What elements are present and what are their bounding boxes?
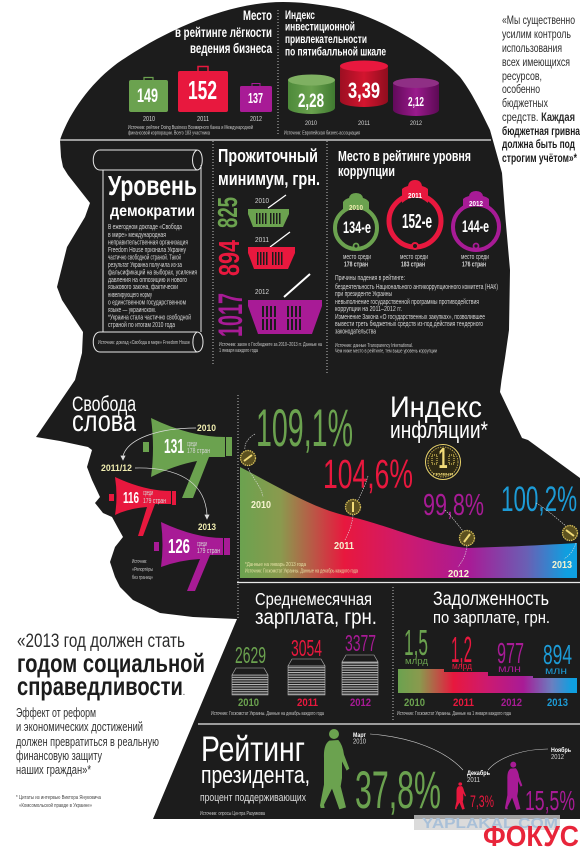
source [219,342,322,354]
years: 2011 [453,697,474,709]
values: 1,2 [451,629,472,670]
source: Источник: [132,559,147,565]
source: Источник: данные Transparency International. [335,343,413,349]
values: млрд [405,656,429,666]
stepped bar chart [398,669,577,693]
date labels: Ноябрь [551,746,571,754]
icon: red suitcase 2011 [178,66,228,112]
quote body: финансовую защиту [16,749,103,763]
area chart [240,467,577,578]
causes text: Причины падения в рейтинге: [335,274,405,282]
source [132,559,153,581]
timeline curves [370,734,548,770]
chart: green cylinder 2010: 2,28 [298,91,324,112]
date labels: 2010 [353,738,366,746]
values: 7,3% [470,792,494,811]
values: 3377 [345,630,376,656]
years: 2012 [250,116,262,123]
panel: freedom of speech: слова [72,405,136,438]
icon: basket 2011: 2011 [255,237,269,244]
footnote [16,795,101,809]
chart: purple cylinder 2012: 2,12 [408,94,424,109]
icon: basket 2012: 2012 [255,289,269,296]
years: 2012 [350,697,371,709]
panel: president rating [200,729,575,820]
icon: red megaphone: 116 [123,490,139,507]
icon: red walking man [455,782,466,810]
source: Источник: Госкомстат Украины. Данные на 1 января каждого года [397,711,511,717]
heading: Место в рейтинге уровня [338,148,471,165]
date labels [353,732,571,784]
icon: green walking man [320,729,349,809]
heading: в рейтинге лёгкости [175,25,272,40]
years: 2010 [404,697,425,709]
footnote: *Данные на январь 2013 года [245,562,306,568]
icon: red handcuff [389,180,441,249]
watermark: YAPLAKAL.COM [422,815,558,832]
source: без границ» [132,575,153,581]
footnote: * Цитаты из интервью Виктора Януковича [16,795,101,801]
icon: purple handcuff: 2012 [469,201,483,208]
body text: давления на оппозицию и нового [108,277,187,284]
icon: basket 2010: 2010 [255,198,269,205]
icon: green suitcase 2010 [129,78,168,112]
values: 977 [497,638,524,670]
chart: purple cylinder 2012 [393,78,439,116]
icon: green handcuff [335,193,377,249]
source: Источник: рейтинг Doing Business Всемирного банка и Международной [128,124,253,131]
chart: red cylinder 2011: 3,39 [348,78,380,103]
icon: red handcuff: 152-е [402,211,432,233]
date labels: Март [353,732,366,739]
year labels [101,423,216,532]
year labels: 2013 [552,560,572,571]
panel: level of democracy scroll [93,150,203,352]
quote: budget control: ресурсов, [502,71,542,83]
icon: hryvnia coin [426,443,460,480]
rotated values: 825 [212,197,243,228]
quote: budget control [502,15,580,165]
panel: average salary [211,589,378,717]
heading: Индекс [285,8,315,22]
causes text: законодательства [335,328,376,336]
captions [343,254,489,268]
body text: Freedom House признала Украину [108,247,186,254]
causes text: при президенте Украины [335,291,392,298]
icon: purple handcuff: 144-е [462,217,489,236]
body text: в мире» международная [108,232,166,239]
captions: место среди [461,254,489,261]
years [143,116,262,123]
source: Источник: закон о Госбюджете за 2010–2013 гг. Данные на [219,342,322,348]
panel: wage arrears: по зарплате, грн. [433,609,550,627]
date labels: Декабрь [467,769,490,777]
heading [175,8,272,56]
values: 3054 [291,635,322,661]
section divider lines [60,10,580,724]
icon: green suitcase 2010: 149 [137,86,158,107]
captions: 183 стран [401,262,425,268]
icon: purple megaphone: 126 [168,536,190,558]
body text: неправительственная организация [108,240,188,246]
body text: нивелирующего норму [108,292,152,299]
quote body: должен превратиться в реальную [16,735,159,749]
quote: social justice: «2013 год должен стать [17,631,185,652]
years: 2011 [297,697,318,709]
icon: hryvnia coin: 1 [438,443,448,475]
years: 2011 [358,121,371,127]
footnote: Источник: Госкомстат Украины. Данные на декабрь каждого года [245,568,358,574]
body text [108,223,197,329]
chart: green cylinder 2010 [288,74,335,114]
panel: president rating: процент поддерживающих [200,792,306,804]
years: 2012 [410,121,423,127]
body text: фальсификаций на выборах, усиления [108,268,197,276]
panel: ease of doing business [128,8,272,136]
years: 2011 [197,116,209,123]
quote: social justice: справедливости. [17,671,185,701]
panel: president rating: президента, [201,762,310,789]
body text: страной по итогам 2010 года [108,321,175,329]
body text: частично свободной страной. Такой [108,254,181,262]
heading: Уровень [108,170,197,201]
panel: president rating: Источник: опросы Центра Разумкова [200,811,265,817]
years [404,697,568,709]
heading: Прожиточный [218,145,318,166]
chart: red cylinder 2011 [340,60,388,107]
causes text: невыполнение государственной программы противодействия [335,298,479,306]
icon: green megaphone [143,418,232,498]
years: 2013 [547,697,568,709]
date labels: 2012 [551,754,564,761]
values: 104,6% [323,451,413,497]
values: 2629 [235,642,266,668]
year labels [251,500,572,580]
heading [338,148,471,180]
values: млрд [452,661,473,671]
body text: *Украина стала частично свободной [108,314,191,322]
source: Источник: Госкомстат Украины. Данные на декабрь каждого года [211,711,324,717]
causes text: коррупции на 2011–2012 гг. [335,306,402,313]
heading: Среднемесячная [255,589,372,609]
rotated values [212,197,250,337]
icon: basket 2011 [248,232,295,269]
quote: budget control: использования [502,43,562,55]
icon: small coins [240,450,578,546]
quote body [16,706,159,777]
rotated values: 1017 [212,293,250,337]
years [238,697,371,709]
values: 37,8% [355,761,441,820]
years: 2010 [238,697,259,709]
footnote [245,562,358,574]
quote body: и экономических достижений [16,720,143,734]
icon: green handcuff: 2010 [349,205,363,212]
year labels: 2012 [448,569,469,580]
panel: freedom of speech [72,393,232,591]
icon: green handcuff: 134-е [343,218,371,237]
icon: purple megaphone: среди [197,541,207,548]
source: 1 января каждого года [219,348,258,354]
icon: basket 2012 [248,274,322,334]
captions: 176 стран [462,262,486,268]
panel: investment attractiveness [284,8,439,136]
heading: привлекательности [285,32,367,46]
causes text: вывести треть бюджетных средств из-под действия тендерного [335,320,483,328]
body text: результат Украина получила из-за [108,262,182,269]
values: млн [498,664,521,675]
arrow: 2010 to 2011/12 [121,428,196,460]
causes text: бездеятельность Национального антикоррупционного комитета (НАК) [335,283,498,291]
quote body: Эффект от реформ [16,706,96,720]
source: финансовой корпорации. Всего 183 участника [128,130,210,136]
values [355,761,575,820]
source: «Репортёры [132,567,153,573]
values [235,630,376,668]
connector lines [245,434,576,567]
causes text [335,274,498,336]
values: 99,8% [423,487,484,522]
causes text: Изменение Закона «О государственных закупках», позволившее [335,314,485,321]
values [256,399,577,522]
heading: по пятибалльной шкале [285,44,386,58]
heading: Индекс [390,391,482,424]
icon: red suitcase 2011: 152 [188,77,217,105]
icon: basket 2010 [248,195,289,227]
rotated values: 894 [214,240,246,276]
values: 109,1% [256,399,353,458]
icon: purple megaphone: 179 стран [197,548,220,555]
heading: Рейтинг [201,730,305,769]
icon: red megaphone [109,477,176,536]
panel: inflation index: инфляции* [390,417,488,444]
heading: Задолженность [433,589,549,610]
panel: average salary: зарплата, грн. [255,605,377,629]
heading: инвестиционной [285,20,355,34]
body text: В ежегодном докладе «Свобода [108,223,182,231]
icon: purple suitcase 2012: 137 [248,91,263,107]
quote: budget control: средств. Каждая [502,112,575,124]
source [335,343,437,354]
icon: purple walking man [505,762,522,810]
icon: green megaphone: 178 стран [187,448,210,455]
year labels: 2011/12 [101,463,132,473]
heading [285,8,386,58]
heading: Место [243,8,272,23]
scroll outline [93,150,203,352]
values [404,622,572,677]
body text: о единственном государственном [108,300,186,306]
source: Чем ниже место в рейтинге, тем выше уровень коррупции [335,348,437,354]
heading: минимум, грн. [218,168,320,189]
years [305,121,423,127]
icon: purple megaphone [154,522,230,591]
captions: место среди [343,254,371,261]
arrow: 2011/12 to 2013 [135,468,209,519]
body text: языкового закона, фактически [108,284,178,291]
heading: Свобода [72,393,136,416]
year labels: 2013 [198,522,216,532]
footnote: «Комсомольской правде в Украине» [19,802,92,809]
panel: wage arrears [397,589,577,717]
icon: red handcuff: 2011 [408,193,422,200]
panel: subsistence minimum [212,145,322,354]
values: млн [545,666,567,677]
captions: место среди [400,254,428,261]
chart: money stacks [232,655,378,695]
panel: corruption ranking [335,148,499,354]
icon: hryvnia coin: ГРИВНЯ [433,472,453,476]
quote: social justice [16,631,205,809]
captions: 178 стран [344,262,368,268]
source [128,124,253,136]
quote: budget control: бюджетных [502,98,548,110]
heading: коррупции [338,163,395,180]
years: 2010 [143,116,155,123]
panel: inflation index [240,391,578,580]
quote body: наших граждан»* [16,763,91,777]
quote: budget control: особенно [502,84,540,96]
years: 2010 [305,121,318,127]
year labels: 2010 [251,500,271,511]
year labels: 2010 [197,423,216,433]
body text: языке — украинском. [108,307,156,314]
source: Источник: доклад «Свобода в мире» Freedom House [98,340,190,346]
panel: level of democracy scroll: демократии [110,203,195,220]
icon: green megaphone: 131 [164,436,184,458]
heading: ведения бизнеса [190,41,272,56]
icon: green megaphone: среди [187,441,197,448]
icon: purple suitcase 2012 [240,84,272,112]
values: 1,5 [404,622,428,663]
icon: red megaphone: среди [143,490,153,497]
heading [218,145,320,189]
year labels: 2011 [334,541,354,552]
icon: red megaphone: 179 стран [143,498,166,505]
quote: social justice: годом социальной [17,648,205,678]
icon: purple handcuff [453,191,499,250]
date labels: 2011 [467,777,480,784]
source: Источник: Европейская бизнес-ассоциация [284,130,360,136]
years: 2012 [501,697,522,709]
